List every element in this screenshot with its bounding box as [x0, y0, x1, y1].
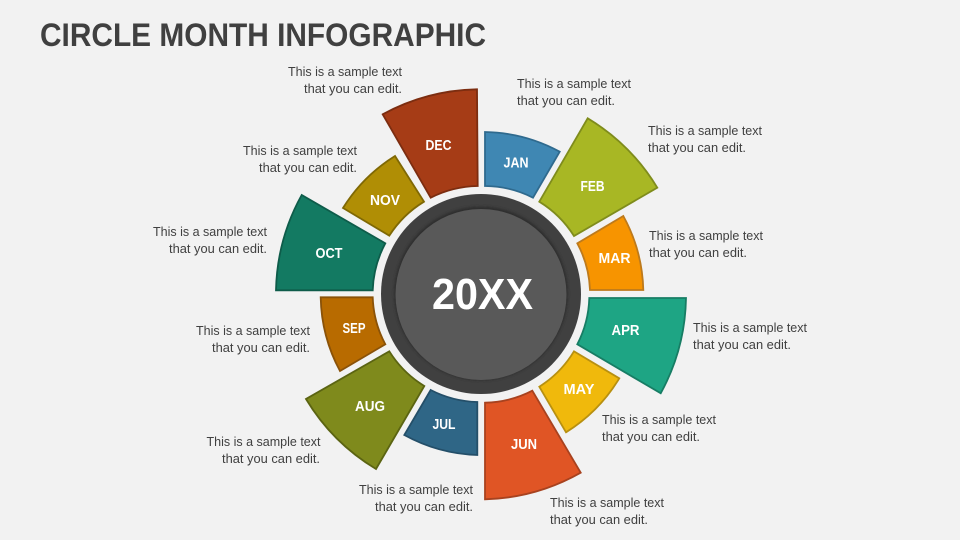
segment: JUN: JUN [511, 437, 537, 453]
text block: NOV: This is a sample text [243, 144, 357, 158]
text block: JUL: This is a sample text [359, 483, 473, 497]
segment: OCT [276, 195, 385, 290]
segment: FEB [539, 118, 657, 236]
text block: MAY [602, 413, 716, 444]
text block: SEP: that you can edit. [212, 341, 310, 355]
segment: JAN: JAN [504, 156, 528, 172]
text block: JUN: that you can edit. [550, 513, 648, 527]
text block: JUN [550, 496, 664, 527]
text block: MAR [649, 229, 763, 260]
text block: JUN: This is a sample text [550, 496, 664, 510]
text block: JUL [359, 483, 473, 514]
text block: AUG [206, 435, 321, 466]
text block: APR: This is a sample text [693, 321, 807, 335]
segment: APR [577, 298, 686, 393]
text block: JUL: that you can edit. [375, 500, 473, 514]
text block: SEP [196, 324, 310, 355]
text block: JAN: that you can edit. [517, 94, 615, 108]
title: CIRCLE MONTH INFOGRAPHIC [40, 17, 486, 53]
segment: MAY [539, 351, 619, 432]
text block: FEB [648, 124, 762, 155]
segment: MAY: MAY [564, 382, 595, 398]
text block: OCT: that you can edit. [169, 242, 267, 256]
text block: DEC: that you can edit. [304, 82, 402, 96]
segment: FEB: FEB [580, 179, 604, 195]
text block: MAR: This is a sample text [649, 229, 763, 243]
text block: APR [693, 321, 807, 352]
text block: SEP: This is a sample text [196, 324, 310, 338]
text block: APR: that you can edit. [693, 338, 791, 352]
segment: MAR: MAR [598, 251, 631, 267]
segment: JUL [404, 390, 477, 455]
text block: JAN [517, 77, 631, 108]
text block: FEB: that you can edit. [648, 141, 746, 155]
text block: NOV [243, 144, 357, 175]
segment: JUL: JUL [432, 417, 456, 433]
text block: DEC [288, 65, 402, 96]
center disc: 20XX [381, 194, 581, 394]
segment: NOV: NOV [370, 193, 400, 209]
segment: JAN [485, 132, 560, 198]
center disc: 20XX: 20XX [432, 270, 533, 319]
segment: APR: APR [612, 323, 640, 339]
segment: NOV [343, 156, 424, 236]
text block: OCT: This is a sample text [153, 225, 267, 239]
segment: AUG: AUG [355, 399, 385, 415]
text block: MAR: that you can edit. [649, 246, 747, 260]
text block: DEC: This is a sample text [288, 65, 402, 79]
text block: AUG: that you can edit. [222, 452, 320, 466]
segment: SEP [321, 297, 385, 371]
segment: SEP: SEP [342, 321, 366, 337]
segment: DEC [383, 89, 478, 198]
segment: DEC: DEC [426, 138, 452, 154]
segment: AUG [306, 351, 424, 469]
text block: OCT [153, 225, 267, 256]
text block: MAY: This is a sample text [602, 413, 716, 427]
text block: MAY: that you can edit. [602, 430, 700, 444]
text block: AUG: This is a sample text [206, 435, 321, 449]
text block: JAN: This is a sample text [517, 77, 631, 91]
text block: FEB: This is a sample text [648, 124, 762, 138]
segment: MAR [577, 216, 643, 290]
segment: JUN [485, 391, 581, 499]
segment: OCT: OCT [316, 246, 343, 262]
month wheel [276, 89, 686, 499]
text block: NOV: that you can edit. [259, 161, 357, 175]
